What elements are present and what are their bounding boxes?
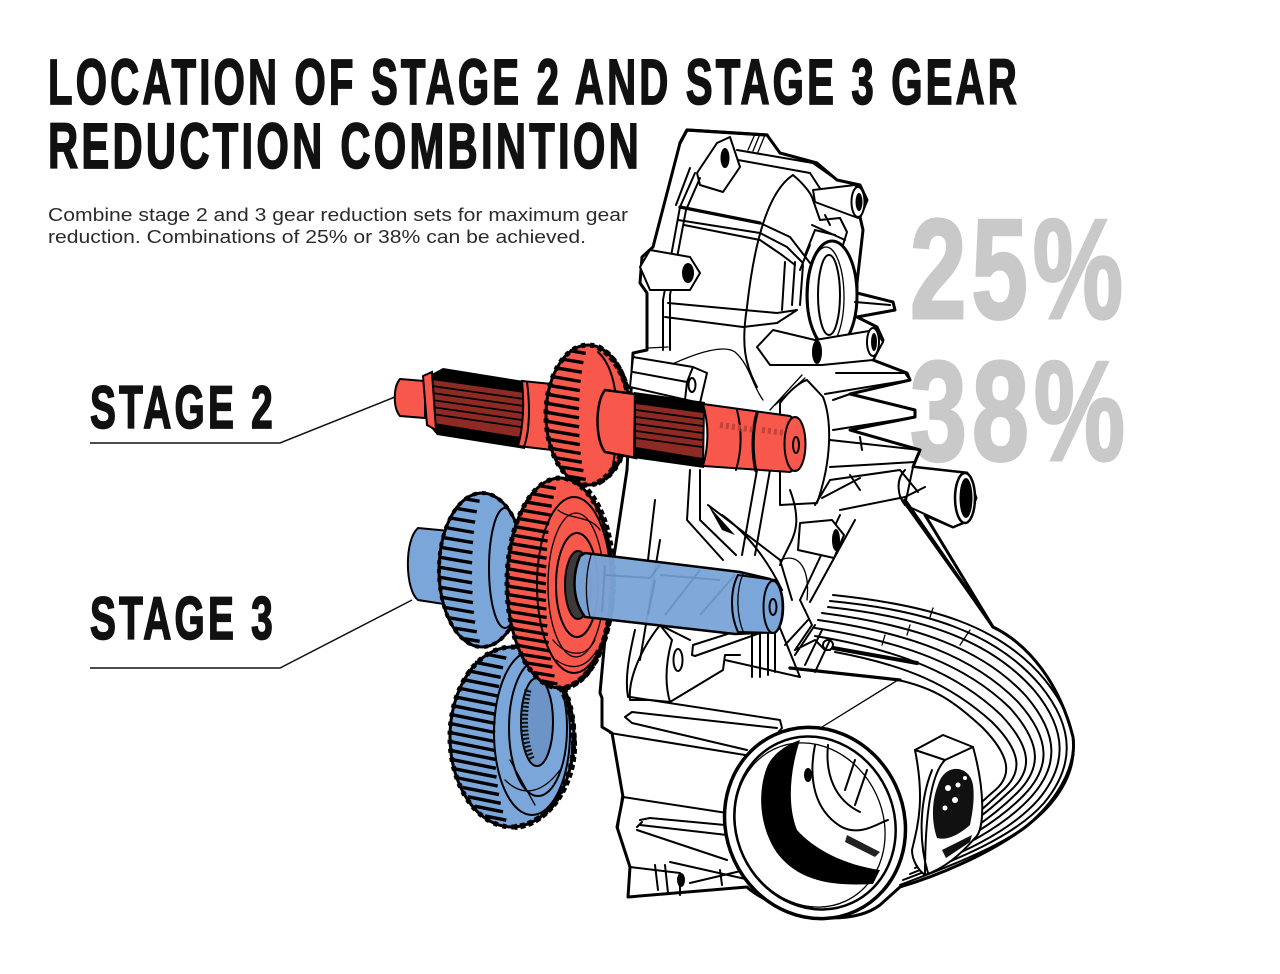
description text: reduction. Combinations of 25% or 38% can be achieved. xyxy=(48,226,586,247)
connector tab xyxy=(630,357,707,403)
housing ribs xyxy=(648,168,810,400)
callout: stage 2: STAGE 2 xyxy=(90,374,276,441)
center boss xyxy=(757,328,883,365)
stage 2 input shaft rear xyxy=(395,368,552,450)
callout: stage 3: STAGE 3 xyxy=(90,585,276,652)
upper case line xyxy=(822,680,898,727)
gear case ribbed band xyxy=(785,595,1074,885)
percentage values xyxy=(910,190,1130,491)
stage 2 upper gear (red) xyxy=(546,345,630,485)
sensor plug xyxy=(912,735,982,875)
top left boss xyxy=(680,130,767,192)
mid section web xyxy=(640,470,993,660)
stage 2 lower gear (red) xyxy=(507,478,613,688)
stage 3 blue output shaft xyxy=(575,553,783,634)
stage 2 red front shaft xyxy=(598,390,806,472)
percentage values: 25% xyxy=(910,190,1128,349)
output bore xyxy=(693,697,937,949)
top ribs xyxy=(737,150,837,387)
lower ribs xyxy=(610,697,782,897)
stage 3 gear set (blue) xyxy=(408,493,574,827)
mid boss xyxy=(798,520,844,558)
top right boss xyxy=(813,185,866,245)
left boss xyxy=(640,250,700,290)
lower web xyxy=(627,625,800,702)
description text: Combine stage 2 and 3 gear reduction sets for maximum gear xyxy=(48,204,628,225)
lower blue gear xyxy=(450,647,574,827)
description text xyxy=(48,204,628,247)
upper blue gear xyxy=(439,493,525,647)
cooling fins xyxy=(825,293,920,467)
blue stub shaft xyxy=(408,528,450,605)
title xyxy=(48,46,1020,182)
bearing ring xyxy=(800,225,857,349)
illustration: transmission housing xyxy=(600,130,1074,949)
circular bearing boss xyxy=(770,375,829,505)
title: REDUCTION COMBINTION xyxy=(48,110,642,182)
output boss xyxy=(905,467,976,527)
housing outline xyxy=(600,130,1074,918)
percentage values: 38% xyxy=(910,332,1130,491)
